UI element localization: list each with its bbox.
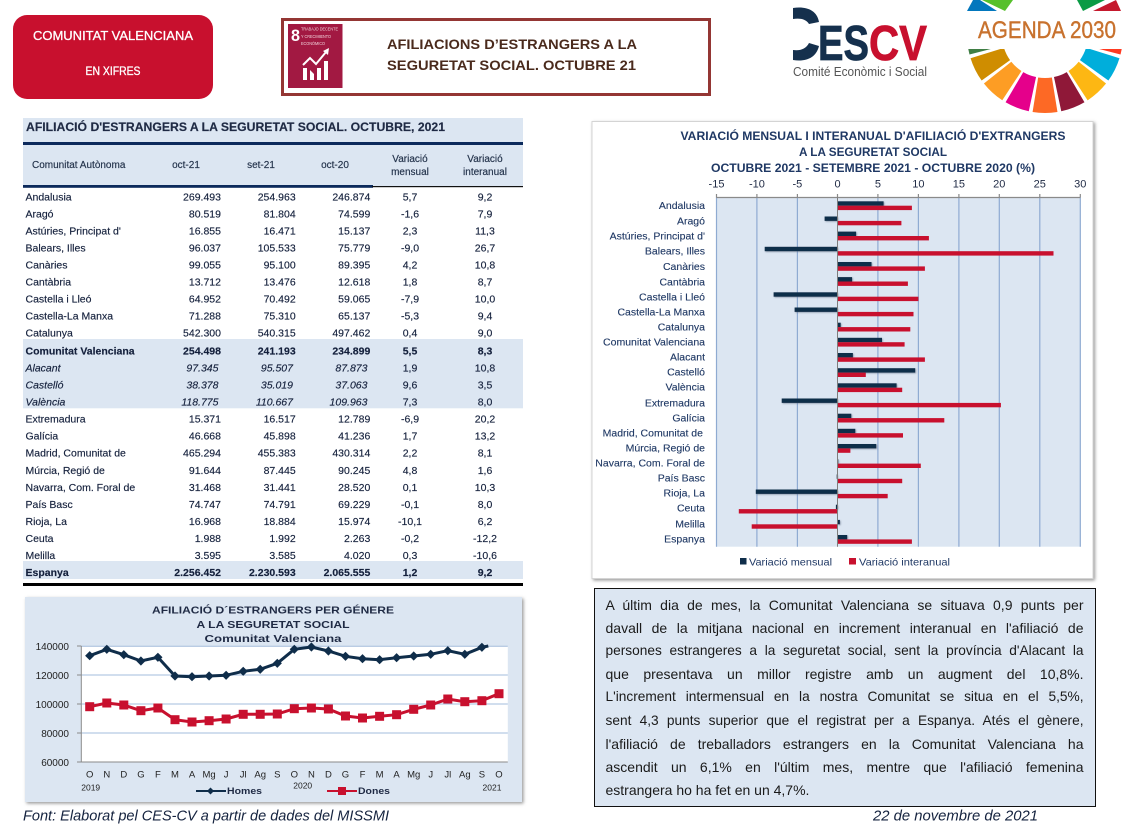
y axis labels: 100000 [36, 700, 69, 711]
table column: variació mensual: -0,1 [401, 499, 419, 511]
table column: oct-21: 15.371 [189, 414, 221, 426]
badge: Comunitat Valenciana en xifres: COMUNITAT VALENCIANA [33, 28, 193, 43]
table header: interanual [463, 167, 507, 178]
category labels: Catalunya [658, 322, 705, 334]
category labels: Melilla [675, 518, 705, 530]
line: Homes [90, 646, 488, 677]
x axis labels: 25 [1034, 178, 1046, 190]
icon: SDG 8 decent work: TRABAJO DECENTE [301, 26, 338, 32]
bars: variació interanual [739, 206, 1054, 544]
table column: set-21: 74.791 [264, 499, 296, 511]
x axis labels: F [155, 770, 161, 780]
table column: regions: Extremadura [26, 414, 86, 426]
commentary text box: l'afiliació de treballadors estrangers en la Comunitat Valenciana ha [606, 736, 1084, 752]
table column: regions: Cantàbria [26, 277, 71, 289]
table column: regions: Galícia [26, 431, 58, 443]
line chart title: A LA SEGURETAT SOCIAL [196, 619, 350, 631]
table column: variació mensual: 0,4 [403, 328, 417, 340]
table column: regions: Navarra, Com. Foral de [26, 482, 135, 494]
plot area [716, 198, 1080, 547]
table column: set-21: 105.533 [258, 243, 296, 255]
table title [23, 118, 523, 142]
icon: SDG 8 decent work: Y CRECIMIENTO [301, 34, 331, 39]
x axis labels: M [171, 770, 179, 780]
table column: set-21: 540.315 [258, 328, 296, 340]
table column: oct-20: 430.314 [332, 448, 370, 460]
table column: set-21: 45.898 [264, 431, 296, 443]
table column: set-21: 3.585 [269, 550, 296, 562]
category labels: Extremadura [645, 398, 705, 410]
table column: variació mensual: 5,5 [403, 346, 417, 358]
table column: oct-21: 13.712 [189, 277, 221, 289]
badge: Comunitat Valenciana en xifres: EN XIFRES [86, 64, 140, 78]
title box [282, 20, 710, 94]
logo: CES CV: Comité Econòmic i Social [793, 64, 927, 79]
line chart legend [196, 786, 390, 797]
x axis labels: G [342, 770, 349, 780]
table column: set-21: 95.100 [264, 260, 296, 272]
y axis labels: 60000 [41, 758, 69, 769]
table column: variació mensual: 1,7 [403, 431, 417, 443]
x axis labels: 2019 [81, 782, 100, 792]
category labels: Castella i Lleó [639, 292, 705, 304]
category labels: Navarra, Com. Foral de [595, 458, 705, 470]
commentary text box: L'increment intermensual en la nostra Comunitat se situa en el 5,5%, [606, 689, 1084, 704]
line chart legend: Homes [227, 786, 262, 797]
table column: variació interanual: 10,0 [475, 294, 495, 306]
x axis labels: 20 [993, 178, 1005, 190]
table column: set-21: 254.963 [258, 192, 296, 204]
table column: variació interanual: 13,2 [475, 431, 495, 443]
table column: variació mensual: 1,9 [403, 363, 417, 375]
category labels: Canàries [663, 261, 705, 273]
table column: regions: Madrid, Comunitat de [26, 448, 126, 460]
chart legend: Variació mensual [749, 556, 832, 568]
icon: SDG 8 decent work: 8 [291, 26, 300, 45]
table column: oct-21: 2.256.452 [174, 567, 221, 579]
table column: regions: Castella-La Manxa [26, 311, 113, 323]
table column: regions: Rioja, La [26, 516, 67, 528]
line chart legend: Dones [358, 786, 390, 797]
table column: regions: Múrcia, Regió de [26, 465, 105, 477]
table column: oct-20: 69.229 [338, 499, 370, 511]
table column: oct-21: 465.294 [183, 448, 221, 460]
x axis labels: N [103, 770, 110, 780]
table column: variació interanual: 8,0 [478, 397, 492, 409]
x axis labels: Jl [444, 770, 451, 780]
table column: oct-21: 16.968 [189, 516, 221, 528]
x axis labels: J [224, 770, 229, 780]
category labels: Andalusia [659, 200, 705, 212]
panel: bar chart variació mensual i interanual [592, 122, 1093, 578]
table column: variació mensual: 2,2 [403, 448, 417, 460]
table column: variació interanual: 10,8 [475, 363, 495, 375]
chart title: VARIACIÓ MENSUAL I INTERANUAL D'AFILIACIÓ D'EXTRANGERS [680, 128, 1066, 143]
table column: variació mensual: 0,3 [403, 550, 417, 562]
table column: set-21: 70.492 [264, 294, 296, 306]
x axis labels: A [189, 770, 196, 780]
x axis labels: -15 [709, 178, 724, 190]
chart legend: Variació interanual [859, 556, 950, 568]
table column: regions: Ceuta [26, 533, 54, 545]
table column: oct-21: 542.300 [183, 328, 221, 340]
bars: variació mensual [756, 201, 915, 539]
table column: regions: País Basc [26, 499, 73, 511]
table column: oct-20: 2.263 [344, 533, 370, 545]
chart title [680, 128, 1066, 175]
x axis labels: Mg [202, 770, 216, 780]
date: 22 de novembre de 2021 [872, 808, 1038, 824]
table column: oct-20: 4.020 [344, 550, 370, 562]
table column: variació interanual: 8,7 [478, 277, 492, 289]
table column: oct-20: 65.137 [338, 311, 370, 323]
x axis labels [81, 770, 503, 792]
table column: variació interanual: 26,7 [475, 243, 495, 255]
x axis labels: S [274, 770, 280, 780]
category labels: Rioja, La [664, 488, 705, 500]
x axis labels: D [120, 770, 127, 780]
category labels: València [666, 382, 705, 394]
table column: oct-21: 254.498 [183, 346, 221, 358]
table column: oct-20: 87.873 [335, 363, 368, 375]
x axis labels: -5 [793, 178, 802, 190]
category labels: Múrcia, Regió de [626, 442, 705, 454]
table column: oct-20: 28.520 [338, 482, 370, 494]
table column: set-21: 31.441 [264, 482, 296, 494]
chart legend [740, 556, 950, 568]
x axis labels: 15 [953, 178, 965, 190]
logo: CES CV: ES [818, 17, 869, 71]
table column: variació interanual: 8,3 [478, 346, 492, 358]
table column: variació mensual: -7,9 [401, 294, 419, 306]
x axis labels: -10 [749, 178, 765, 190]
heading [387, 36, 637, 73]
table column: oct-20: 74.599 [338, 209, 370, 221]
table column: oct-21: 31.468 [189, 482, 221, 494]
icon: SDG 8 decent work: ECONÓMICO [301, 40, 325, 46]
line chart title [152, 604, 394, 645]
table column: regions: Melilla [26, 550, 55, 562]
table column: set-21: 16.517 [264, 414, 296, 426]
category labels: País Basc [658, 472, 705, 484]
table column: variació interanual: -12,2 [473, 533, 497, 545]
line: Dones [90, 694, 499, 722]
x axis labels: Ag [254, 770, 266, 780]
table column: oct-21: 3.595 [195, 550, 221, 562]
table column: oct-20: 15.137 [338, 226, 370, 238]
commentary text box: ascendit un 6,1% en l'últim mes, mentre que l'afiliació femenina [606, 759, 1084, 775]
table header: oct-20 [321, 160, 349, 171]
commentary text box: persones estrangeres a la seguretat social, sent la província d'Alacant la [606, 643, 1084, 658]
table column: set-21: 18.884 [264, 516, 296, 528]
y axis labels: 120000 [36, 671, 69, 682]
x axis labels: J [428, 770, 433, 780]
x axis labels: Ag [459, 770, 471, 780]
table header: Variació [392, 154, 428, 165]
table column: oct-21 [174, 192, 221, 579]
x axis labels: O [86, 770, 93, 780]
table column: variació interanual: 9,2 [478, 192, 492, 204]
commentary text box [594, 588, 1096, 807]
table column: set-21 [249, 192, 296, 579]
table column: set-21: 16.471 [264, 226, 296, 238]
table column: regions: Canàries [26, 260, 68, 272]
table column: oct-20: 89.395 [338, 260, 370, 272]
table column: set-21: 35.019 [261, 380, 293, 392]
table column: variació mensual: 4,8 [403, 465, 417, 477]
table column: oct-20: 59.065 [338, 294, 370, 306]
table column: oct-21: 74.747 [189, 499, 221, 511]
table column: variació mensual: 1,2 [403, 567, 417, 579]
table column: oct-21: 269.493 [183, 192, 221, 204]
table column: regions: València [26, 397, 66, 409]
table column: oct-21: 80.519 [189, 209, 221, 221]
table column: oct-21: 97.345 [186, 363, 219, 375]
table column: set-21: 75.310 [264, 311, 296, 323]
table column: oct-21: 1.988 [195, 533, 221, 545]
table column: variació mensual: -9,0 [401, 243, 419, 255]
table column: oct-20: 12.789 [338, 414, 370, 426]
table title: AFILIACIÓ D'ESTRANGERS A LA SEGURETAT SOCIAL. OCTUBRE, 2021 [26, 119, 445, 134]
commentary text box: davall de la mitjana nacional en increment interanual en l'afiliació de [606, 620, 1084, 636]
x axis labels: 0 [834, 178, 841, 190]
table column: oct-21: 96.037 [189, 243, 221, 255]
category labels [595, 200, 705, 546]
table column: variació mensual: -10,1 [398, 516, 422, 528]
line chart title: AFILIACIÓ D´ESTRANGERS PER GÉNERE [152, 604, 394, 616]
table column: oct-21: 38.378 [186, 380, 219, 392]
chart title: A LA SEGURETAT SOCIAL [799, 145, 947, 159]
table column: variació interanual: 20,2 [475, 414, 495, 426]
table column: variació mensual: 9,6 [403, 380, 417, 392]
table column: regions [24, 192, 135, 579]
category labels: Astúries, Principat d' [610, 230, 705, 242]
line chart title: Comunitat Valenciana [204, 633, 342, 645]
table column: oct-20: 37.063 [335, 380, 368, 392]
table column: variació interanual: 9,0 [478, 328, 492, 340]
table column: variació interanual: 8,0 [478, 499, 492, 511]
table column: variació mensual [398, 192, 422, 579]
table column: set-21: 2.230.593 [249, 567, 296, 579]
category labels: Castella-La Manxa [617, 306, 705, 318]
table column: variació mensual: 4,2 [403, 260, 417, 272]
table column: set-21: 87.445 [264, 465, 296, 477]
table header: set-21 [247, 160, 275, 171]
table column: oct-21: 64.952 [189, 294, 221, 306]
table column: oct-20: 234.899 [332, 346, 370, 358]
table column: oct-20: 246.874 [332, 192, 370, 204]
table column: oct-21: 91.644 [189, 465, 221, 477]
category labels: Balears, Illes [645, 246, 705, 258]
source note: Font: Elaborat pel CES-CV a partir de dades del MISSMI [23, 808, 389, 824]
x axis labels: N [308, 770, 315, 780]
table column: variació interanual: 7,9 [478, 209, 492, 221]
table column: oct-20: 41.236 [338, 431, 370, 443]
table header [23, 142, 523, 188]
table column: oct-20: 75.779 [338, 243, 370, 255]
table column: oct-20: 2.065.555 [324, 567, 370, 579]
table column: regions: Castella i Lleó [26, 294, 92, 306]
heading: AFILIACIONS D’ESTRANGERS A LA [387, 36, 637, 52]
badge: Comunitat Valenciana en xifres [13, 15, 213, 99]
table column: oct-20: 109.963 [330, 397, 368, 409]
y axis labels: 140000 [36, 642, 69, 653]
table column: oct-20: 497.462 [332, 328, 370, 340]
table column: regions: Andalusia [26, 192, 72, 204]
x axis labels: A [393, 770, 400, 780]
x axis labels: Mg [407, 770, 420, 780]
table column: variació interanual: 3,5 [478, 380, 492, 392]
table column: oct-20: 15.974 [338, 516, 370, 528]
table column: regions: Catalunya [26, 328, 73, 340]
table column: regions: Castelló [26, 380, 64, 392]
category labels: Galícia [672, 412, 705, 424]
y axis labels [36, 642, 69, 769]
table column: regions: Espanya [26, 567, 69, 579]
x axis labels: O [291, 770, 298, 780]
table column: variació interanual: 11,3 [475, 226, 495, 238]
logo: CES CV: CV [869, 17, 927, 71]
table column: oct-21: 71.288 [189, 311, 221, 323]
chart title: OCTUBRE 2021 - SETEMBRE 2021 - OCTUBRE 2020 (%) [711, 161, 1035, 175]
x axis labels: 2021 [483, 782, 502, 792]
commentary text box: que presentava un millor registre amb un augment del 10,8%. [606, 666, 1084, 682]
table column: variació mensual: -6,9 [401, 414, 419, 426]
category labels: Cantàbria [659, 276, 705, 288]
logo: CES CV [793, 8, 927, 79]
panel: data table [23, 118, 523, 586]
x axis labels: Jl [240, 770, 247, 780]
table column: set-21: 13.476 [264, 277, 296, 289]
table column: variació interanual: 6,2 [478, 516, 492, 528]
table column: variació interanual [473, 192, 497, 579]
category labels: Alacant [670, 352, 705, 364]
table header: oct-21 [172, 160, 200, 171]
x axis labels: D [325, 770, 332, 780]
category labels: Madrid, Comunitat de [603, 428, 703, 440]
table column: variació mensual: 2,3 [403, 226, 417, 238]
x axis labels: M [376, 770, 384, 780]
x axis labels: G [137, 770, 145, 780]
table column: set-21: 110.667 [256, 397, 294, 409]
category labels: Castelló [667, 366, 705, 378]
table column: variació interanual: 9,4 [478, 311, 492, 323]
category labels: Espanya [664, 534, 705, 546]
table column: variació mensual: 0,1 [403, 482, 417, 494]
table column: set-21: 81.804 [264, 209, 296, 221]
table column: oct-20 [324, 192, 370, 579]
category labels: Aragó [677, 215, 705, 227]
table column: regions: Balears, Illes [26, 243, 86, 255]
commentary text box: A últim dia de mes, la Comunitat Valenciana se situava 0,9 punts per [606, 596, 1084, 612]
commentary text box: sent 4,3 punts superior que el registrat per a Espanya. Atés el gènere, [606, 712, 1084, 728]
table column: set-21: 95.507 [261, 363, 294, 375]
x axis labels: S [479, 770, 485, 780]
table column: oct-21: 16.855 [189, 226, 221, 238]
line chart plot [81, 646, 508, 762]
table column: regions: Comunitat Valenciana [26, 346, 135, 358]
table column: variació interanual: 9,2 [478, 567, 492, 579]
table column: variació interanual: 8,1 [478, 448, 492, 460]
table highlight bands [23, 339, 523, 579]
logo: Agenda 2030 wheel [967, 0, 1122, 113]
x axis labels: 30 [1074, 178, 1086, 190]
table column: oct-21: 99.055 [189, 260, 221, 272]
icon: SDG 8 decent work [288, 24, 342, 88]
panel: line chart per gènere [25, 597, 522, 802]
table column: variació mensual: 5,7 [403, 192, 417, 204]
table column: variació mensual: -1,6 [401, 209, 419, 221]
table column: variació mensual: -5,3 [401, 311, 419, 323]
x axis labels: O [495, 770, 503, 780]
table column: regions: Aragó [26, 209, 54, 221]
category labels: Comunitat Valenciana [603, 337, 705, 349]
table column: variació mensual: -0,2 [401, 533, 419, 545]
x axis labels: 10 [912, 178, 925, 190]
table column: set-21: 1.992 [269, 533, 296, 545]
table column: variació mensual: 1,8 [403, 277, 417, 289]
table column: oct-21: 46.668 [189, 431, 221, 443]
x axis labels: 2020 [293, 780, 312, 790]
y axis labels: 80000 [41, 729, 69, 740]
commentary text box: estrangera ho ha fet en un 4,7%. [606, 782, 809, 798]
table column: regions: Astúries, Principat d' [26, 226, 121, 238]
table column: variació interanual: -10,6 [473, 550, 497, 562]
table column: variació interanual: 10,3 [475, 482, 495, 494]
table column: regions: Alacant [24, 363, 62, 375]
table column: variació mensual: 7,3 [403, 397, 417, 409]
table column: set-21: 455.383 [258, 448, 296, 460]
table column: oct-21: 118.775 [181, 397, 219, 409]
table column: oct-20: 12.618 [338, 277, 370, 289]
table column: set-21: 241.193 [258, 346, 296, 358]
x axis labels: 5 [875, 178, 881, 190]
table column: variació interanual: 10,8 [475, 260, 495, 272]
table header: Variació [467, 154, 503, 165]
table column: variació interanual: 1,6 [478, 465, 492, 477]
x axis labels [709, 178, 1086, 190]
table header: mensual [391, 167, 429, 178]
table header: Comunitat Autònoma [32, 160, 126, 171]
heading: SEGURETAT SOCIAL. OCTUBRE 21 [387, 57, 636, 73]
x axis labels: F [360, 770, 366, 780]
table column: oct-20: 90.245 [338, 465, 370, 477]
category labels: Ceuta [677, 502, 705, 514]
